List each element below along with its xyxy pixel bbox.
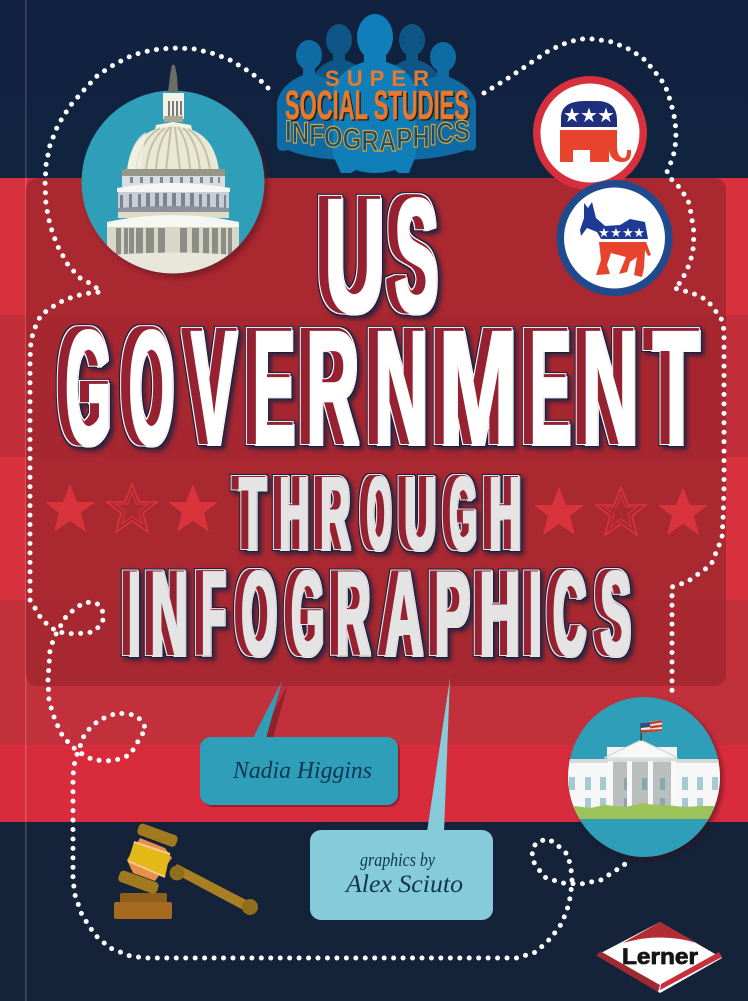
flag <box>640 720 662 741</box>
icons: row of stars right <box>534 487 708 535</box>
title: GOVERNMENT: N <box>581 296 639 479</box>
icon: Democratic donkey: ★ <box>622 225 634 240</box>
icon: Democratic donkey: ★ <box>633 225 645 240</box>
logo text <box>285 66 470 158</box>
callout: author Nadia Higgins <box>200 681 400 807</box>
title: INFOGRAPHICS: N <box>150 547 188 681</box>
title: INFOGRAPHICS: I <box>128 547 140 681</box>
icon: Capitol dome <box>82 65 268 282</box>
dotted route: right side <box>484 39 724 698</box>
series logo: Super Social Studies Infographics <box>277 14 476 173</box>
text: S <box>394 164 438 347</box>
dotted route: left, bottom and loops <box>30 48 631 958</box>
title: THROUGH: T <box>239 456 266 571</box>
title: THROUGH: G <box>449 456 476 571</box>
icon: Democratic donkey: ★ <box>610 225 622 240</box>
title: INFOGRAPHICS: P <box>434 547 470 681</box>
statue on top <box>168 65 178 92</box>
icon: Republican elephant <box>533 76 647 190</box>
title: GOVERNMENT: M <box>438 296 518 479</box>
title: GOVERNMENT: R <box>306 296 359 479</box>
text: H <box>489 456 521 571</box>
callout: graphics by Alex Sciuto: graphics by <box>360 850 435 871</box>
title: US: U <box>324 164 385 347</box>
icon: Republican elephant: ★ <box>580 105 598 127</box>
logo text: SOCIAL STUDIES <box>285 82 469 128</box>
title: THROUGH: H <box>279 456 309 571</box>
panel: dark red title backing <box>26 178 726 686</box>
title: GOVERNMENT: O <box>129 296 174 479</box>
logo: Lerner publisher: Lerner <box>622 944 698 969</box>
title: INFOGRAPHICS: A <box>385 547 423 681</box>
title: INFOGRAPHICS: O <box>241 547 277 681</box>
callout: graphics by Alex Sciuto <box>310 678 493 920</box>
icon: Republican elephant: ★ <box>563 105 581 127</box>
logo text: SOCIAL STUDIES <box>286 84 470 130</box>
logo silhouettes <box>277 14 476 173</box>
title: INFOGRAPHICS: R <box>336 547 370 681</box>
title: THROUGH: U <box>404 456 436 571</box>
title: INFOGRAPHICS: H <box>479 547 520 681</box>
title: INFOGRAPHICS: C <box>553 547 586 681</box>
icon: White House <box>560 697 730 860</box>
icon: Democratic donkey: ★ <box>598 225 610 240</box>
title: THROUGH: R <box>320 456 350 571</box>
icons: row of stars left <box>45 484 218 532</box>
title: GOVERNMENT: E <box>253 296 295 479</box>
title: GOVERNMENT: G <box>65 296 112 479</box>
callout: author Nadia Higgins: Nadia Higgins <box>232 758 372 784</box>
icon: gavel <box>114 823 258 919</box>
logo text: SUPER <box>325 66 429 91</box>
logo: Lerner publisher <box>597 922 722 993</box>
title: GOVERNMENT: N <box>374 296 428 479</box>
title: INFOGRAPHICS: I <box>529 547 541 681</box>
text: S <box>600 547 631 681</box>
title: INFOGRAPHICS: F <box>201 547 226 681</box>
icon: Republican elephant: ★ <box>597 105 615 127</box>
title: GOVERNMENT: V <box>191 296 237 479</box>
title: INFOGRAPHICS: G <box>291 547 324 681</box>
title: GOVERNMENT: E <box>530 296 571 479</box>
icon: Democratic donkey <box>556 180 672 296</box>
title: THROUGH: O <box>367 456 391 571</box>
callout: graphics by Alex Sciuto: Alex Sciuto <box>344 871 463 898</box>
logo text: INFOGRAPHICS <box>285 115 470 158</box>
